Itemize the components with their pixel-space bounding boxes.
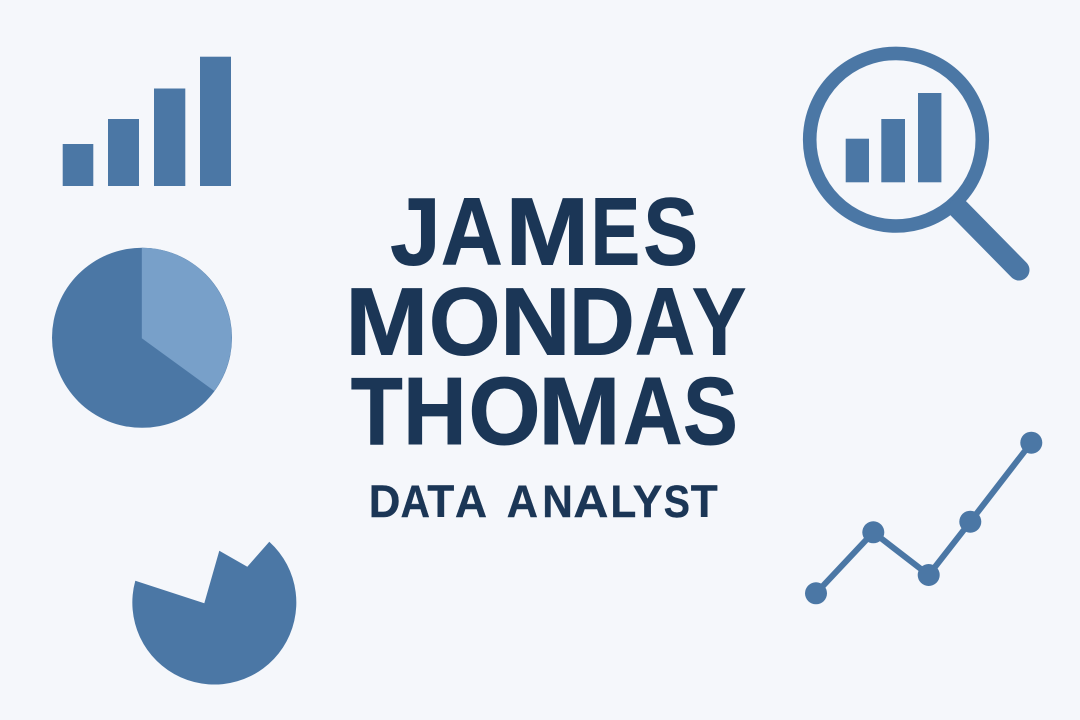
title: Y bbox=[692, 269, 746, 376]
title: T bbox=[351, 358, 403, 465]
title bbox=[345, 179, 746, 465]
subtitle: T bbox=[691, 476, 718, 527]
icon: pie chart bbox=[52, 248, 232, 428]
title: N bbox=[500, 269, 571, 376]
subtitle: L bbox=[610, 476, 636, 527]
subtitle: A bbox=[401, 476, 430, 527]
title: O bbox=[429, 269, 500, 376]
subtitle: Y bbox=[633, 476, 662, 527]
icon: bar chart bbox=[63, 57, 231, 186]
subtitle: A bbox=[573, 476, 608, 527]
subtitle: A bbox=[455, 476, 487, 527]
title: A bbox=[623, 358, 682, 465]
icon: line chart bbox=[805, 432, 1042, 604]
title: A bbox=[635, 269, 695, 376]
title: O bbox=[468, 358, 540, 465]
title: S bbox=[683, 358, 738, 465]
subtitle: S bbox=[664, 476, 690, 527]
title: A bbox=[441, 179, 503, 286]
title: M bbox=[345, 269, 428, 376]
title: M bbox=[538, 358, 621, 465]
subtitle: N bbox=[542, 476, 573, 527]
title: D bbox=[569, 269, 635, 376]
icon: magnifying glass with bars bbox=[810, 53, 1019, 270]
title: S bbox=[643, 179, 698, 286]
title: M bbox=[506, 179, 589, 286]
subtitle: D bbox=[369, 476, 400, 527]
icon: broken pie chart bbox=[132, 542, 296, 685]
title: J bbox=[390, 179, 441, 286]
subtitle: A bbox=[507, 476, 538, 527]
subtitle: T bbox=[427, 476, 454, 527]
title: E bbox=[591, 179, 640, 286]
title: H bbox=[403, 358, 466, 465]
